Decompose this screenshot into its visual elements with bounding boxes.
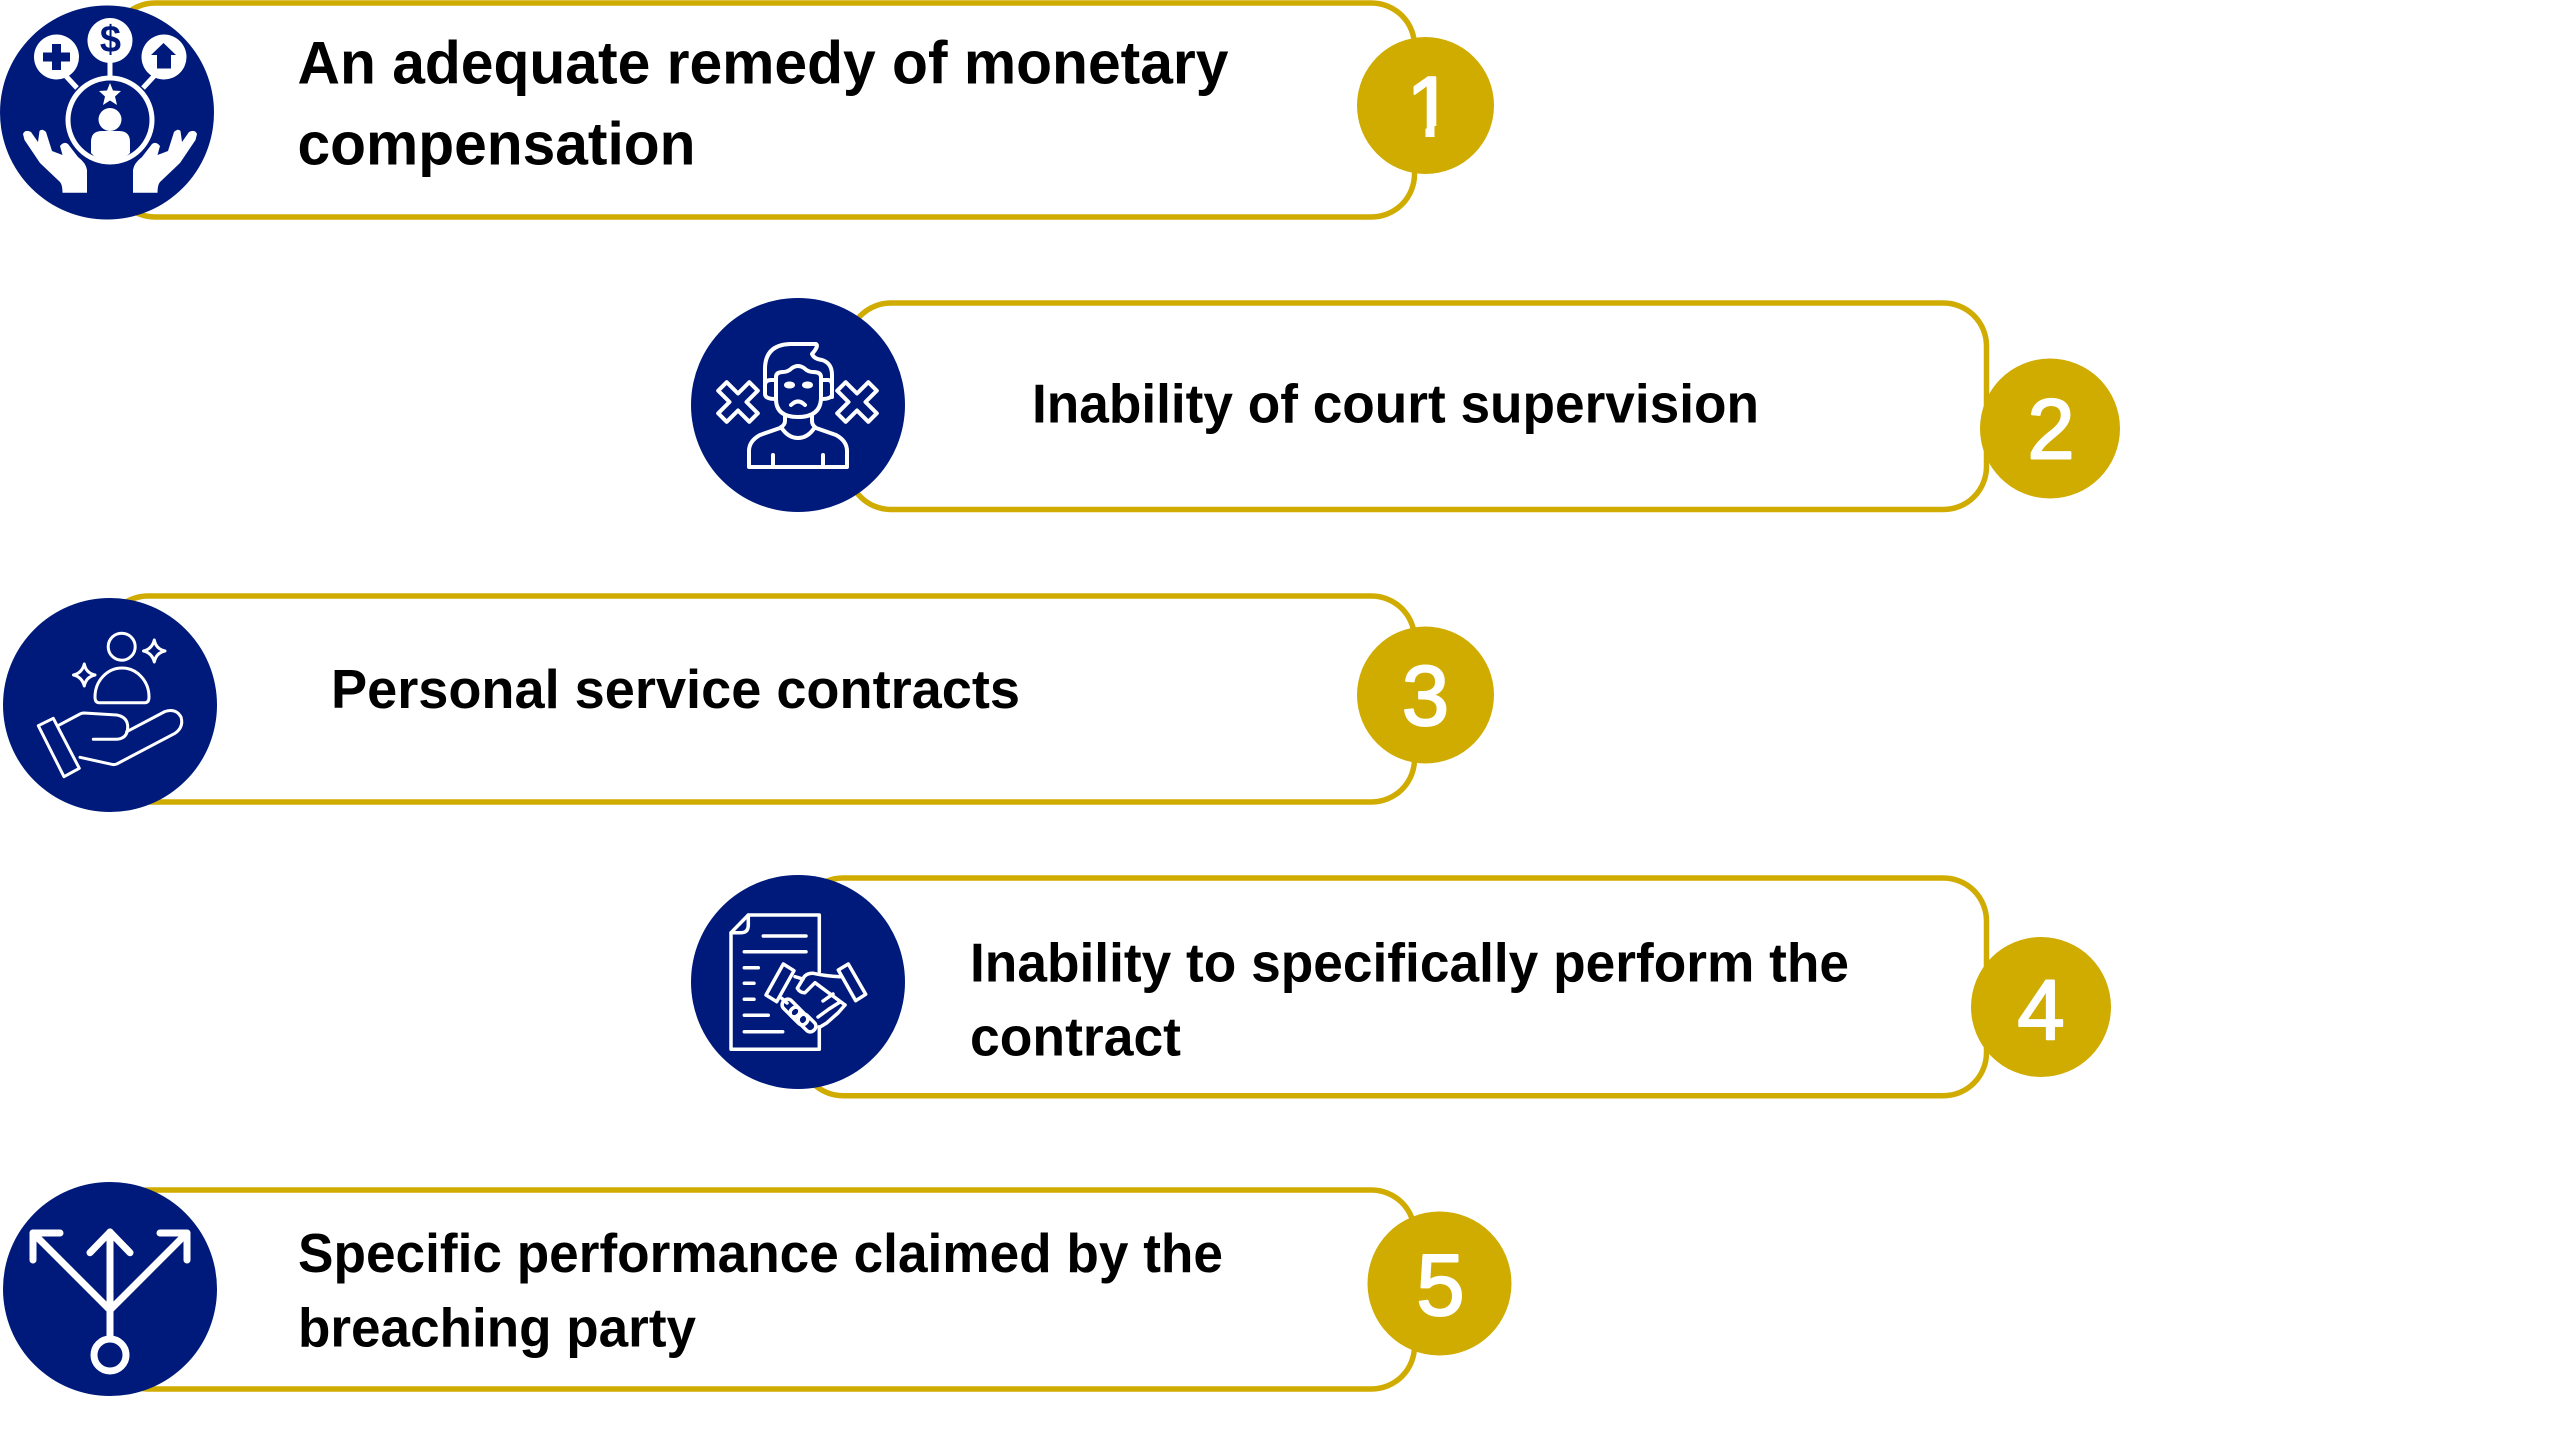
text: item 5: breaching party xyxy=(298,1296,696,1358)
text: item 5: Specific performance claimed by the xyxy=(298,1222,1223,1284)
card outline 5 xyxy=(105,1190,1414,1389)
panel: item 4 inability to specifically perform xyxy=(691,875,2111,1096)
number badge 3: 3 xyxy=(1402,649,1449,744)
number badge 1: 1 xyxy=(1406,60,1454,155)
text: item 1: An adequate remedy of monetary xyxy=(298,30,1229,96)
text: item 5 xyxy=(298,1222,1223,1358)
text: item 4: contract xyxy=(970,1006,1181,1068)
text: item 4: Inability to specifically perform the xyxy=(970,932,1849,994)
card outline 1 xyxy=(112,3,1414,217)
text: item 3: Personal service contracts xyxy=(331,658,1020,720)
text: item 1 xyxy=(298,30,1229,178)
number badge 5: 5 xyxy=(1416,1237,1465,1334)
icon: hands holding person with benefits: $ xyxy=(100,19,121,61)
panel: item 2 court supervision xyxy=(691,298,2120,512)
icon: hands holding person with benefits xyxy=(0,6,214,220)
icon: sad person with crosses xyxy=(691,298,905,512)
text: item 1: compensation xyxy=(298,110,696,178)
number badge 3 xyxy=(1357,626,1494,764)
card outline 4 xyxy=(800,878,1986,1096)
panel: item 5 claimed by breaching party xyxy=(3,1182,1512,1396)
number badge 4 xyxy=(1971,937,2111,1077)
icon: branching arrows xyxy=(3,1182,217,1396)
number badge 5 xyxy=(1368,1212,1512,1356)
number badge 2: 2 xyxy=(2027,382,2075,478)
panel: item 3 personal service contracts xyxy=(3,596,1494,812)
card outline 3 xyxy=(105,596,1414,802)
panel: item 1 monetary compensation xyxy=(0,3,1494,220)
icon: hand holding person xyxy=(3,598,217,812)
number badge 4: 4 xyxy=(2017,964,2065,1058)
text: item 4 xyxy=(970,932,1849,1068)
icon: contract and handshake xyxy=(691,875,905,1089)
number badge 1 xyxy=(1357,37,1494,174)
card outline 2 xyxy=(848,303,1986,510)
text: item 2: Inability of court supervision xyxy=(1032,372,1759,434)
number badge 2 xyxy=(1980,358,2120,498)
